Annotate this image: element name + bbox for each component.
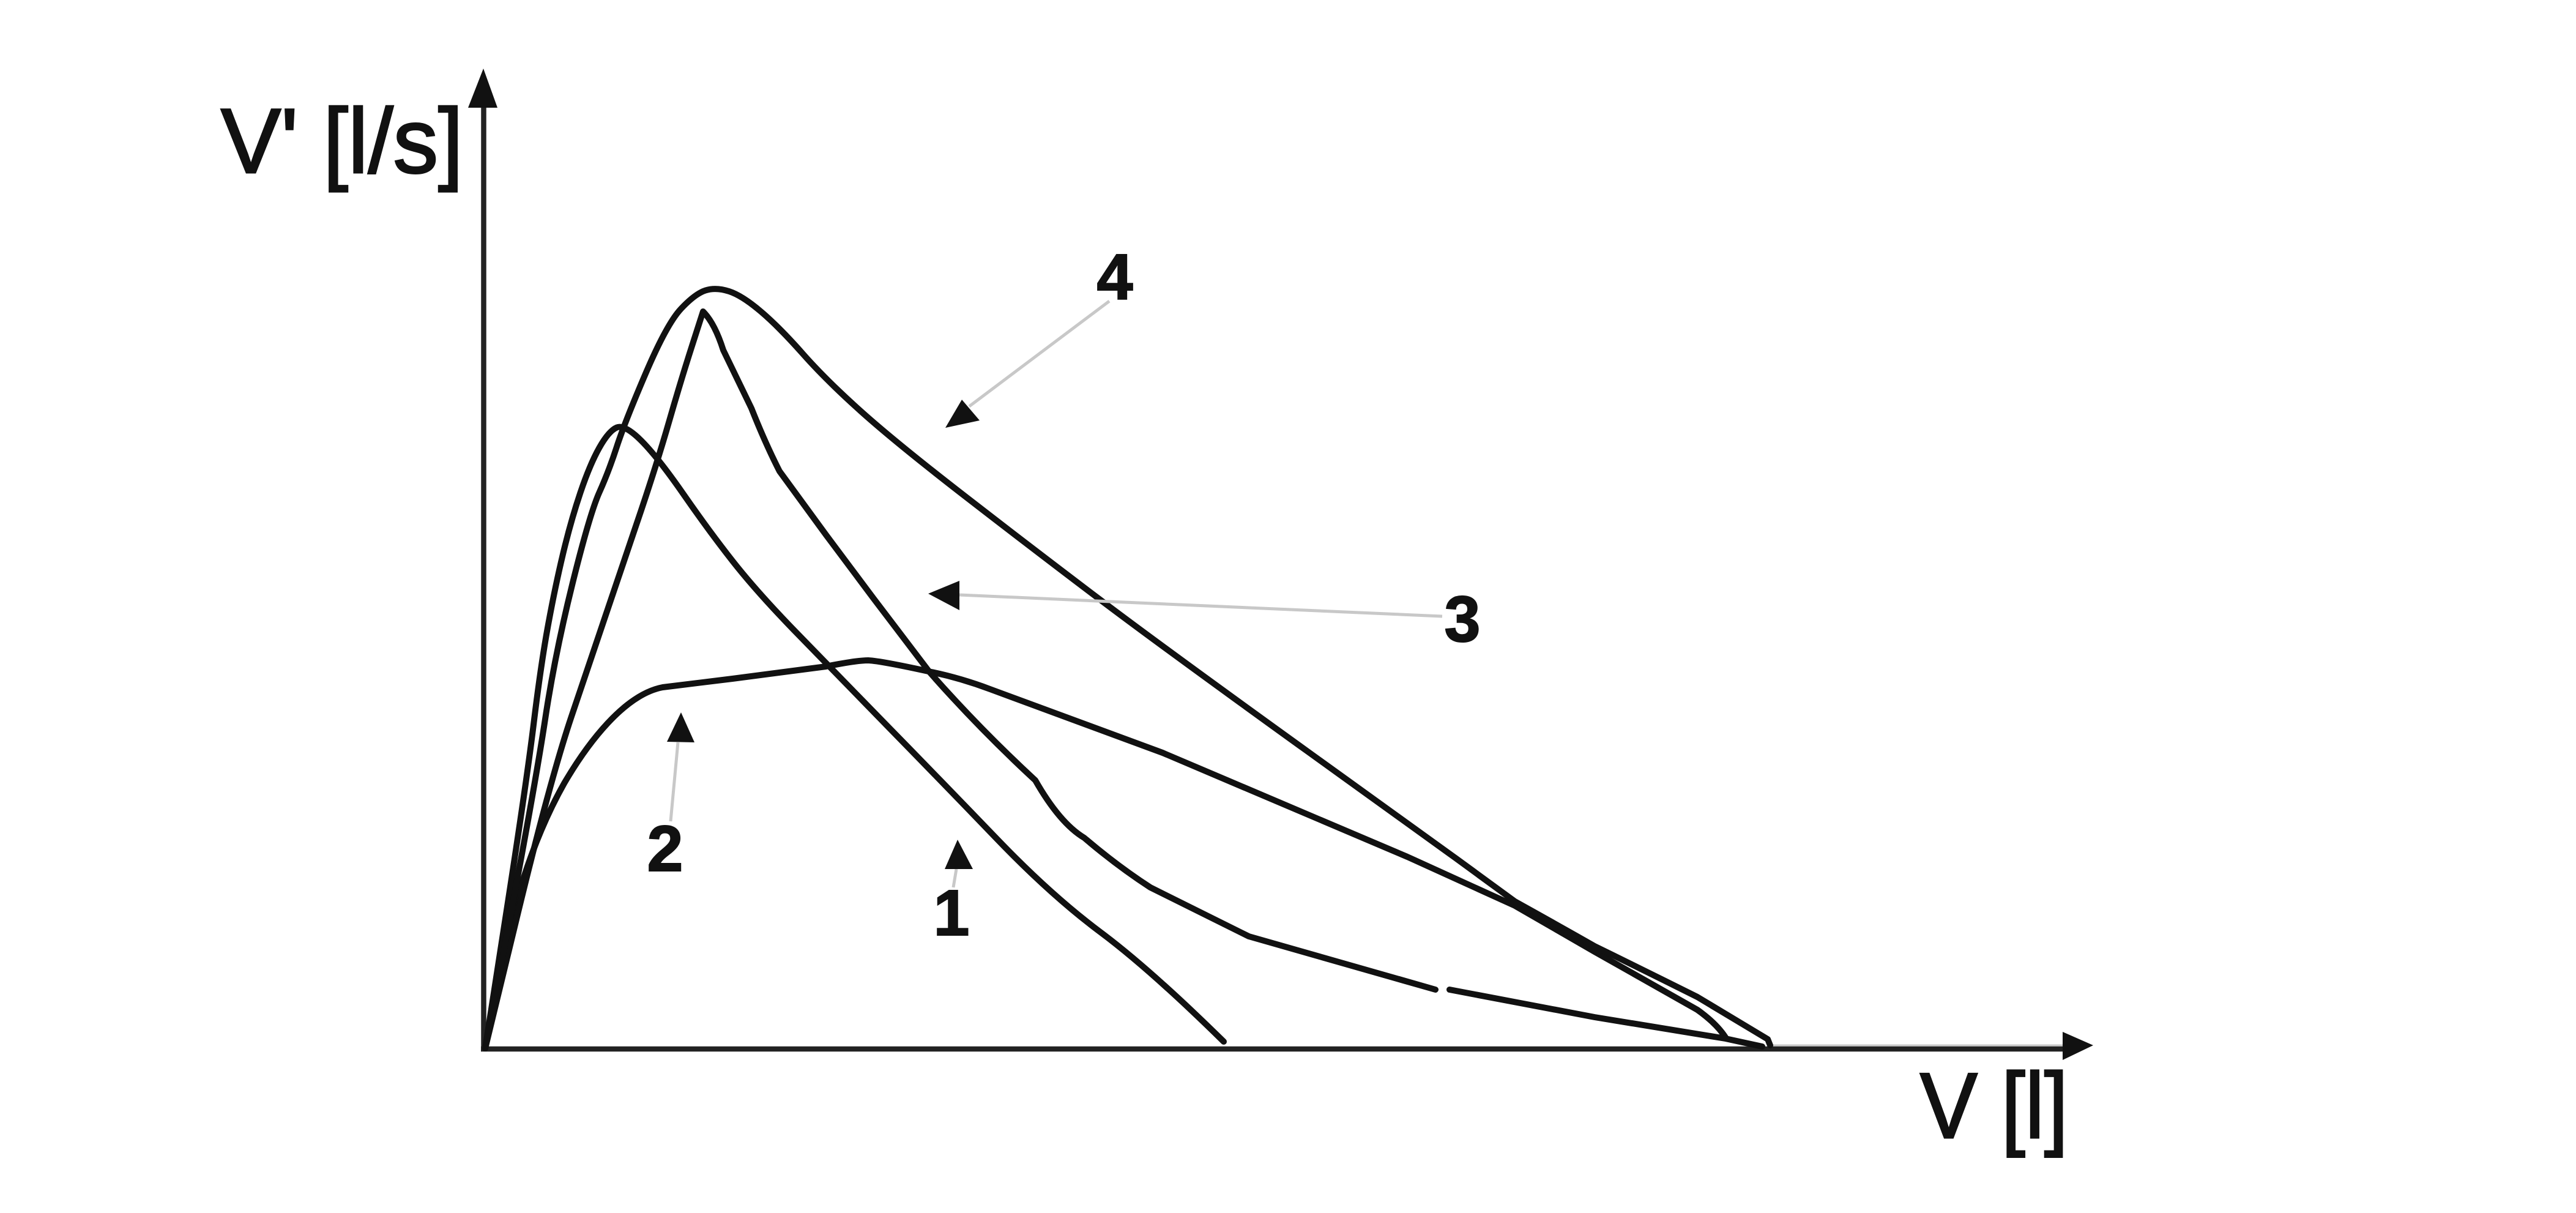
curve 3 <box>485 312 1762 1048</box>
label 1: 1 <box>934 877 969 949</box>
curve 1 <box>485 427 1224 1048</box>
arrow to curve 2 <box>667 712 694 821</box>
x axis with arrow <box>481 1032 2093 1060</box>
label 2: 2 <box>647 813 683 885</box>
y axis label: V' [l/s] <box>221 89 463 192</box>
x axis label: V [l] <box>1920 1054 2068 1158</box>
arrow to curve 1 <box>945 840 973 887</box>
y axis with arrow <box>468 69 497 1051</box>
curve 4 <box>485 289 1770 1048</box>
label 3: 3 <box>1445 583 1480 655</box>
curve 2 <box>485 660 1725 1048</box>
label 4: 4 <box>1097 241 1133 313</box>
arrow to curve 3 <box>928 581 1442 616</box>
arrow to curve 4 <box>945 301 1109 428</box>
